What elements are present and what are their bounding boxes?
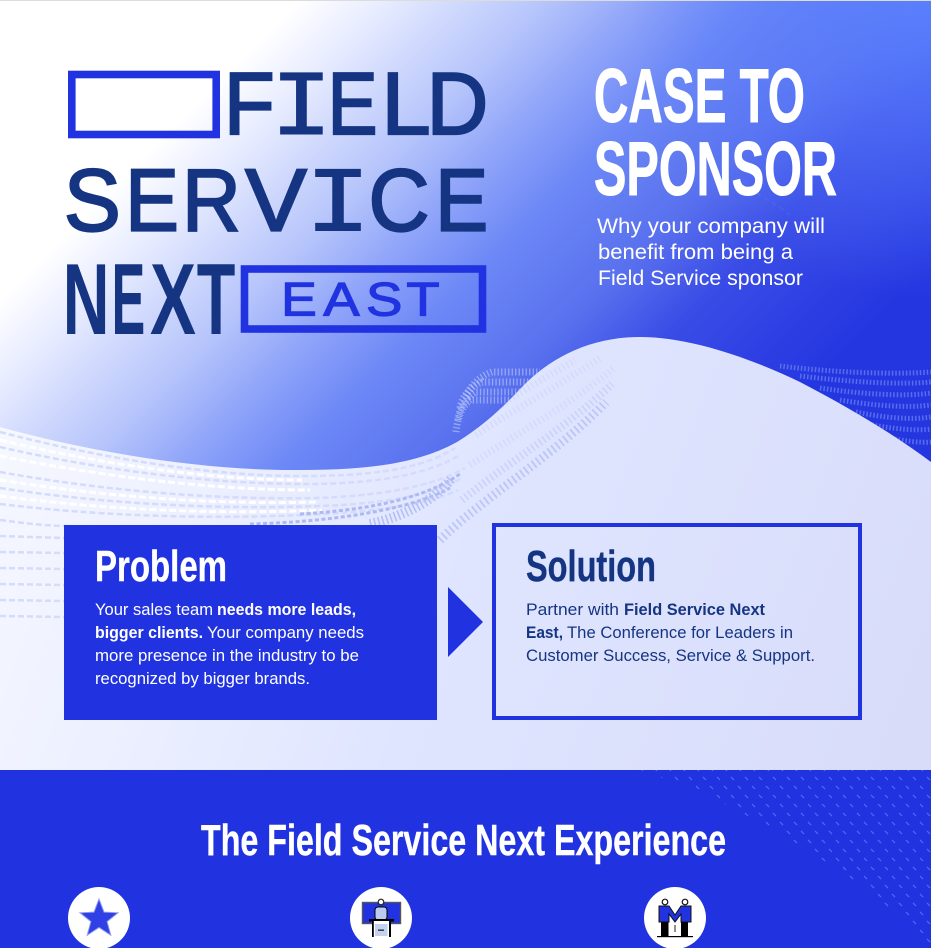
- problem text: recognized by bigger brands.: [95, 670, 310, 688]
- ribbon mesh: [0, 358, 614, 617]
- panel: experience band: [0, 770, 931, 948]
- solution text: Customer Success, Service & Support.: [526, 647, 815, 665]
- logo word SERVICE: E: [435, 151, 488, 249]
- subtitle: Field Service sponsor: [598, 267, 803, 290]
- logo word FIELD: F: [224, 55, 275, 154]
- wave shape: [0, 330, 931, 770]
- logo: Field Service Next East: [63, 54, 488, 356]
- logo word SERVICE: I: [305, 153, 371, 259]
- logo word SERVICE: C: [368, 152, 430, 250]
- title: Case to Sponsor: CASE TO: [594, 54, 805, 139]
- logo word NEXT: E: [112, 244, 145, 356]
- problem heading: Problem: [95, 542, 227, 591]
- logo word EAST: E: [281, 273, 317, 326]
- subtitle: [597, 215, 825, 290]
- logo word SERVICE: V: [245, 151, 307, 250]
- solution text: The Conference for Leaders in: [567, 624, 793, 642]
- solution text: East,: [526, 624, 563, 642]
- logo word FIELD: L: [382, 54, 431, 153]
- problem text: Your company needs: [207, 624, 364, 642]
- logo word EAST: T: [406, 273, 440, 326]
- panel: solution: [494, 525, 860, 718]
- logo word NEXT: N: [63, 244, 109, 356]
- problem text: bigger clients.: [95, 624, 203, 642]
- solution text: Partner with: [526, 601, 619, 619]
- icon: two people shaking hands: [644, 887, 706, 948]
- logo word FIELD: D: [427, 56, 488, 153]
- arrow: [448, 587, 483, 657]
- logo word EAST: A: [323, 273, 360, 326]
- logo word NEXT: X: [150, 244, 196, 356]
- panel: problem: [64, 525, 437, 720]
- logo word SERVICE: E: [125, 151, 179, 249]
- subtitle: Why your company will: [597, 215, 825, 238]
- problem text: more presence in the industry to be: [95, 647, 359, 665]
- solution text: Field Service Next: [624, 601, 765, 619]
- problem text: Your sales team: [95, 601, 213, 619]
- logo word SERVICE: R: [182, 150, 241, 249]
- icon: star: [68, 887, 130, 948]
- problem text: [95, 601, 364, 688]
- logo word EAST: S: [366, 273, 402, 326]
- logo word SERVICE: [64, 150, 488, 259]
- logo word SERVICE: S: [64, 152, 121, 250]
- logo word FIELD: I: [270, 56, 332, 162]
- experience heading: The Field Service Next Experience: [201, 816, 726, 865]
- logo word NEXT: T: [197, 244, 235, 356]
- background mesh above the wave: [456, 162, 931, 442]
- subtitle: benefit from being a: [598, 241, 793, 264]
- icon: presenter: [350, 887, 412, 948]
- logo empty box: [72, 74, 216, 134]
- solution text: [526, 601, 815, 665]
- problem text: needs more leads,: [217, 601, 356, 619]
- logo word FIELD: [224, 54, 488, 162]
- logo word NEXT: [63, 244, 235, 356]
- title: Case to Sponsor: [594, 54, 837, 212]
- logo east box: [244, 269, 482, 329]
- logo word FIELD: E: [328, 55, 377, 153]
- logo word EAST: [281, 273, 440, 326]
- solution heading: Solution: [526, 542, 656, 591]
